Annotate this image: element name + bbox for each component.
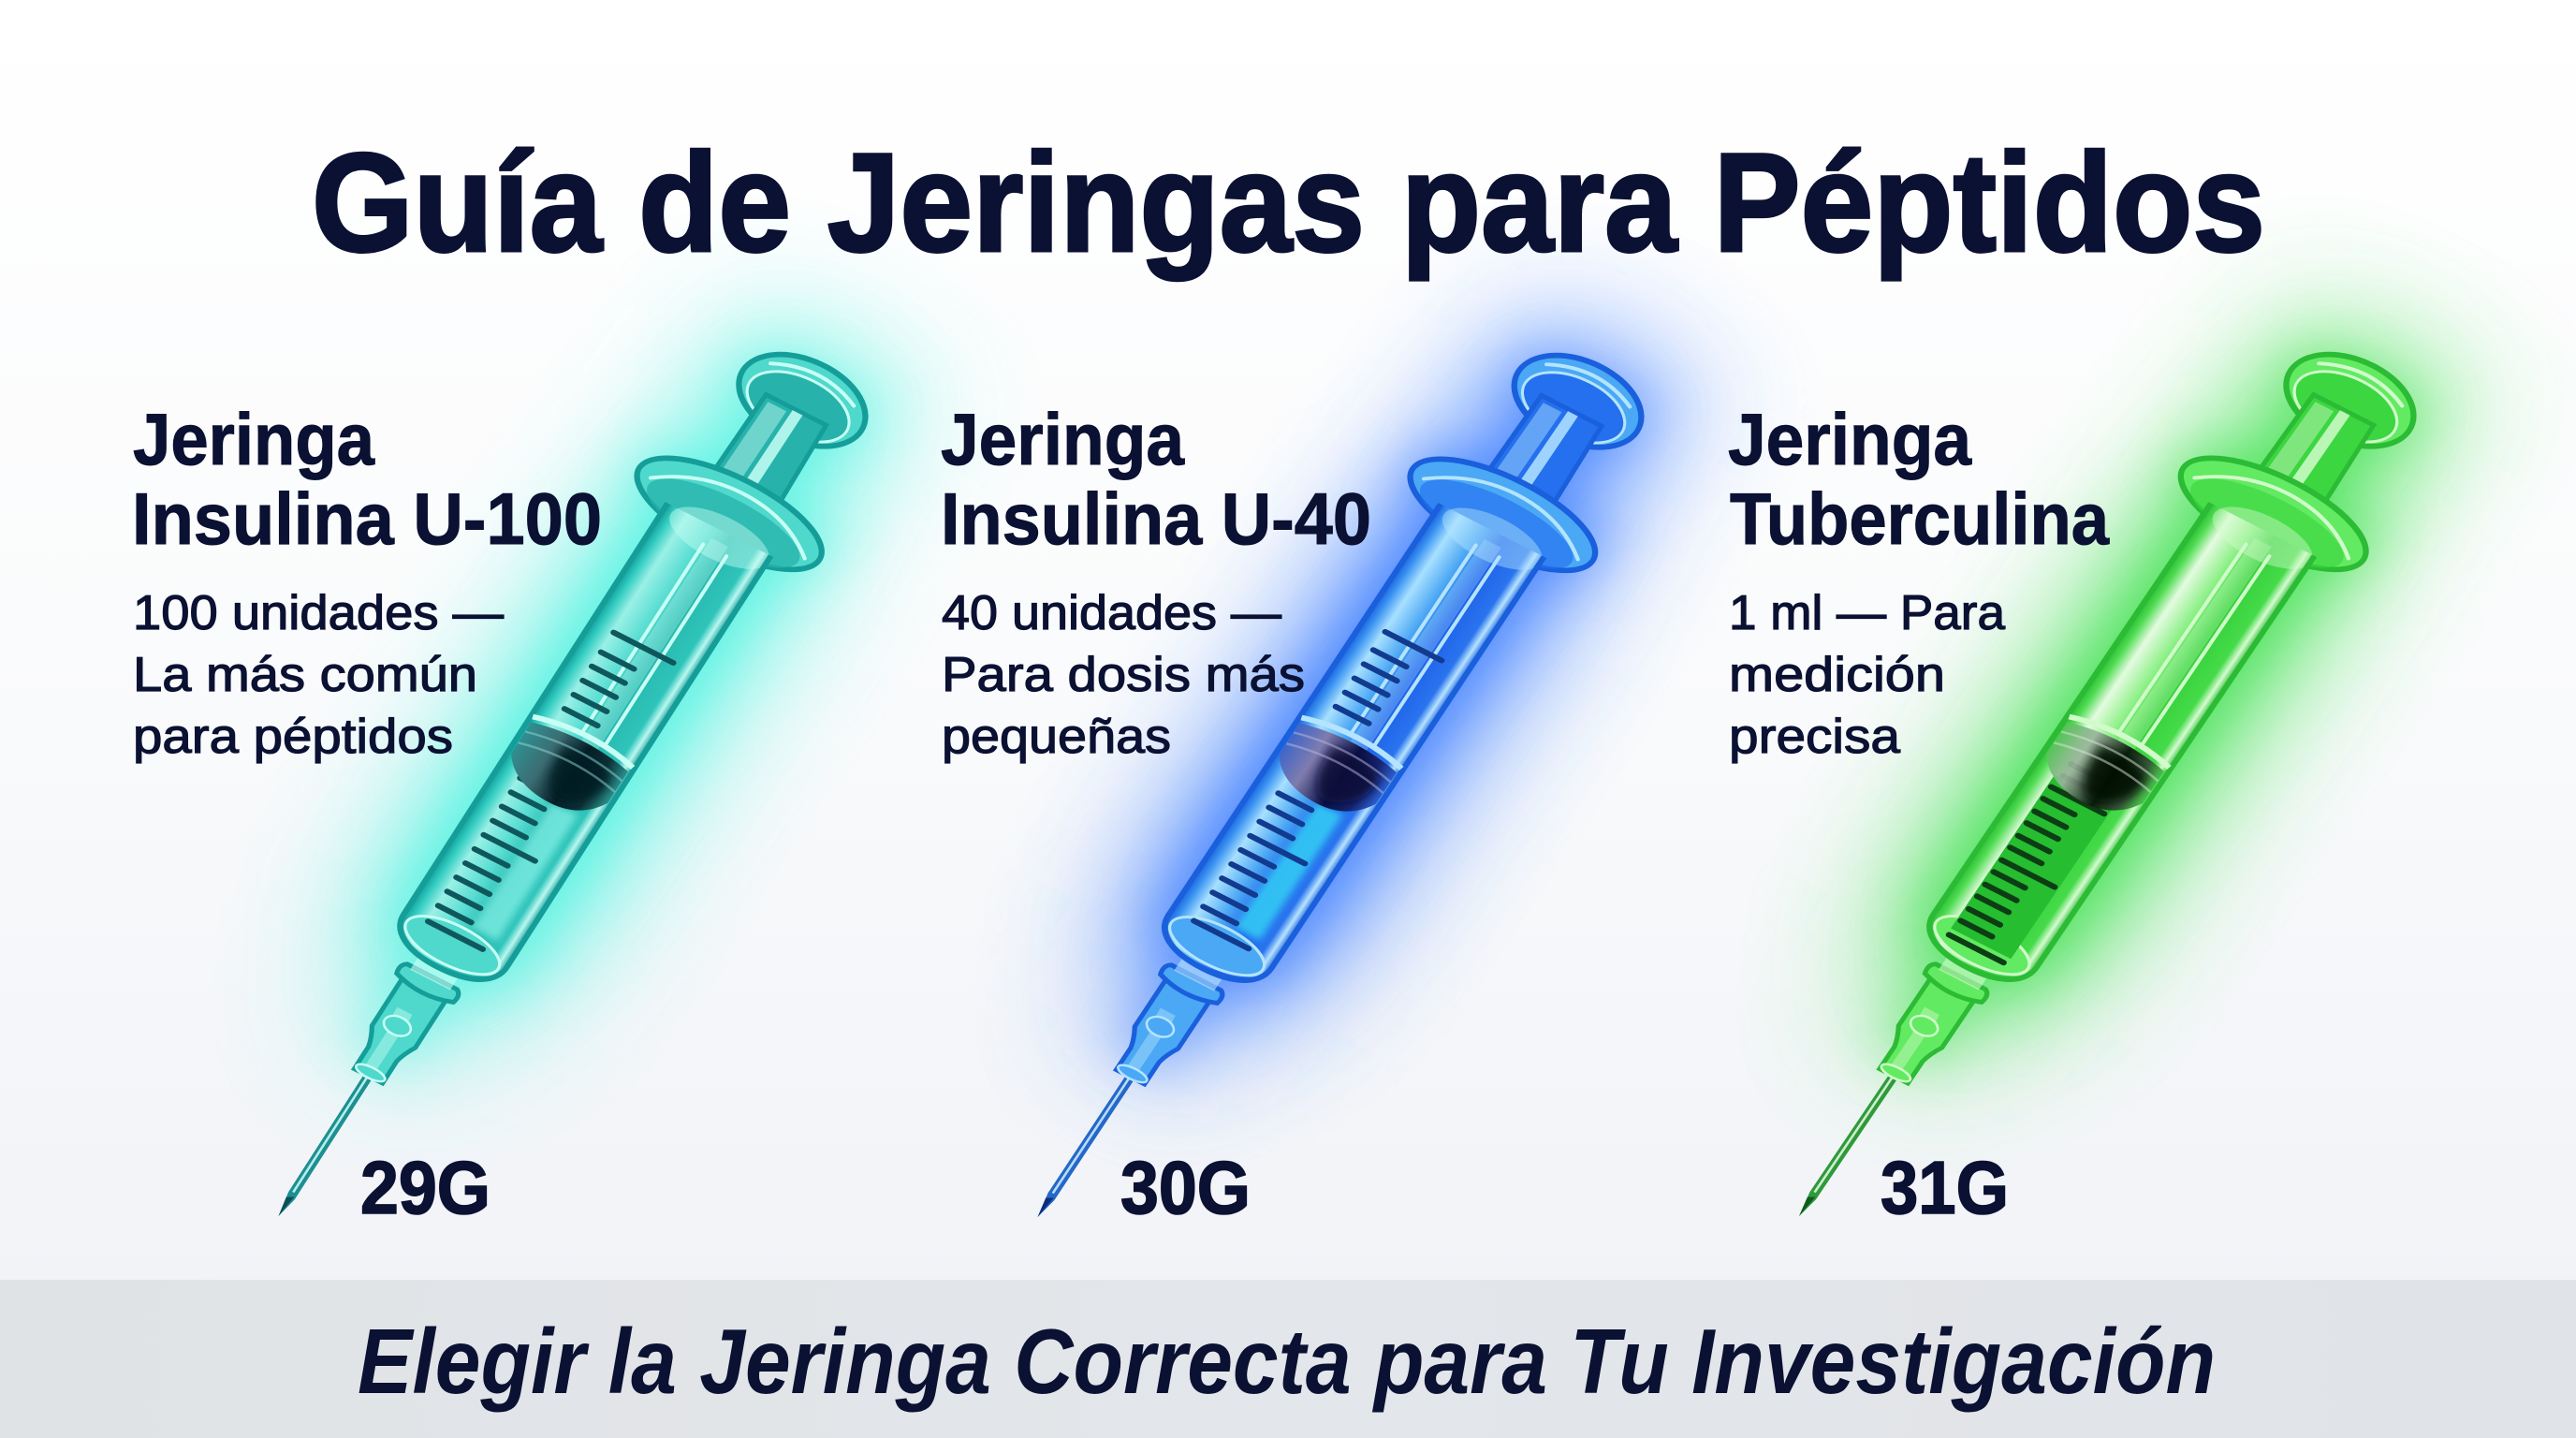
syringe: U-40 blue xyxy=(947,313,1696,1263)
finger flange xyxy=(2161,436,2385,592)
glow: blue halo xyxy=(1054,315,1693,1104)
gauge label: 29G: 29G xyxy=(360,1146,490,1229)
description: U-100 xyxy=(133,586,504,764)
needle hub xyxy=(1864,951,1998,1093)
description: U-100: para péptidos xyxy=(133,710,453,764)
heading: U-40: Insulina U-40 xyxy=(941,477,1371,560)
needle xyxy=(1795,1067,1902,1218)
finger flange xyxy=(619,436,840,592)
graduation ticks xyxy=(1949,761,2121,962)
description: tuberculin: precisa xyxy=(1729,710,1900,764)
description: U-100: 100 unidades — xyxy=(133,586,504,640)
heading: U-40: Jeringa xyxy=(941,398,1185,480)
plunger head xyxy=(1496,336,1660,466)
barrel xyxy=(1915,491,2324,994)
gauge label: 30G: 30G xyxy=(1120,1146,1251,1229)
plunger stopper xyxy=(1263,712,1406,827)
text block: U-40 xyxy=(941,398,1371,764)
graduation ticks xyxy=(1193,632,1442,949)
heading: U-40 xyxy=(941,398,1371,560)
text block: U-100 xyxy=(132,398,602,764)
plunger rod xyxy=(1469,394,1605,534)
footer band xyxy=(0,1280,2576,1438)
barrel xyxy=(1150,492,1553,995)
description: U-40: pequeñas xyxy=(942,710,1171,764)
description: U-40: 40 unidades — xyxy=(942,586,1281,640)
plunger stopper xyxy=(495,711,637,826)
plunger stopper xyxy=(2029,711,2174,826)
plunger head xyxy=(2267,335,2433,465)
title: Guía de Jeringas para Péptidos xyxy=(312,124,2265,281)
description: tuberculin: 1 ml — Para xyxy=(1729,586,2005,640)
plunger rod xyxy=(2239,393,2377,533)
heading: U-100 xyxy=(132,398,602,560)
description: U-100: La más común xyxy=(133,648,477,702)
heading: U-100: Jeringa xyxy=(133,398,375,480)
gauge label: 31G: 31G xyxy=(1881,1146,2009,1229)
finger flange xyxy=(1391,437,1614,593)
barrel xyxy=(387,491,780,994)
needle xyxy=(1033,1068,1139,1219)
graduation ticks xyxy=(428,632,673,952)
needle hub xyxy=(338,951,468,1093)
footer tagline: Elegir la Jeringa Correcta para Tu Investigación xyxy=(358,1310,2216,1413)
description: U-40 xyxy=(942,586,1305,764)
plunger rod xyxy=(695,393,829,533)
glow: teal halo xyxy=(292,314,917,1103)
heading: tuberculin: Tuberculina xyxy=(1730,477,2110,560)
description: U-40: Para dosis más xyxy=(942,648,1305,702)
description: tuberculin: medición xyxy=(1729,648,1945,702)
syringe: U-100 teal xyxy=(188,312,919,1262)
plunger head xyxy=(721,335,884,465)
syringe: tuberculin green xyxy=(1709,312,2468,1262)
heading: U-100: Insulina U-100 xyxy=(132,477,602,560)
glow: green halo xyxy=(1818,314,2466,1103)
needle xyxy=(274,1067,376,1218)
text block: tuberculin xyxy=(1728,398,2110,764)
description: tuberculin xyxy=(1729,586,2005,764)
heading: tuberculin: Jeringa xyxy=(1728,398,1972,480)
needle hub xyxy=(1100,952,1233,1093)
heading: tuberculin xyxy=(1728,398,2110,560)
